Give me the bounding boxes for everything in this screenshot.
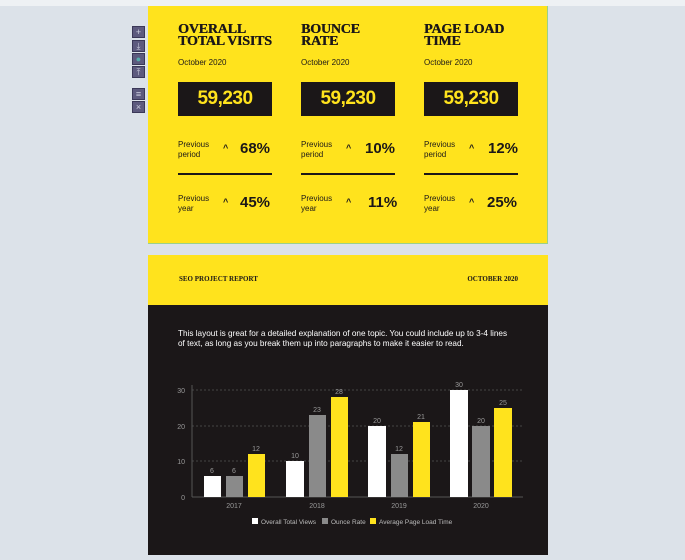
column: page load: PAGE LOAD (424, 22, 504, 37)
column: visits: October 2020 (178, 58, 226, 67)
toolbar icons: ● (136, 54, 141, 64)
toolbar icons: ≡ (136, 89, 141, 99)
column: visits: ^ (223, 197, 228, 207)
toolbar icons: × (136, 102, 141, 112)
column: bounce: BOUNCE (301, 22, 360, 37)
column: visits: year (178, 204, 194, 213)
panel: report header: OCTOBER 2020 (467, 275, 518, 283)
panel: stats (148, 6, 548, 244)
column: bounce: Previous (301, 194, 332, 203)
bar chart: 20 (177, 424, 185, 431)
bar chart: 12 (395, 446, 403, 453)
column: visits (178, 22, 272, 213)
column: page load (424, 22, 518, 213)
column: page load: TIME (424, 34, 461, 49)
column: bounce: ^ (346, 197, 351, 207)
bar chart: 30 (455, 382, 463, 389)
column: bounce: 59,230 (320, 88, 376, 109)
bar chart: 12 (252, 446, 260, 453)
bar chart: 20 (477, 418, 485, 425)
column: bounce: 10% (365, 140, 395, 157)
column: visits: ^ (223, 143, 228, 153)
panel: report header (148, 255, 548, 305)
bar chart: 28 (335, 389, 343, 396)
bar chart: 2020 (473, 503, 489, 510)
column: page load: period (424, 150, 446, 159)
column: bounce: Previous (301, 140, 332, 149)
bar chart: 23 (313, 407, 321, 414)
column: visits: TOTAL VISITS (178, 34, 272, 49)
column: visits: OVERALL (178, 22, 246, 37)
column: page load: Previous (424, 194, 455, 203)
toolbar icons: + (136, 27, 141, 37)
column: visits: 45% (240, 194, 270, 211)
column: bounce: 11% (368, 194, 397, 211)
bar chart: 25 (499, 400, 507, 407)
text block: This layout is great for a detailed explanation of one topic. You could include up to 3-4 lines of text, as long as you break them up into paragraphs to make it easier to read. (178, 329, 507, 348)
column: visits: Previous (178, 140, 209, 149)
column: bounce (301, 22, 397, 213)
column: bounce: year (301, 204, 317, 213)
column: page load: Previous (424, 140, 455, 149)
toolbar icons (132, 26, 145, 113)
column: bounce: RATE (301, 34, 338, 49)
column: page load: 25% (487, 194, 517, 211)
bar chart: 21 (417, 414, 425, 421)
column: bounce: period (301, 150, 323, 159)
column: bounce: October 2020 (301, 58, 349, 67)
column: visits: period (178, 150, 200, 159)
bar chart: 2017 (226, 503, 242, 510)
column: page load: ^ (469, 143, 474, 153)
panel: report header: SEO PROJECT REPORT (179, 275, 258, 283)
column: visits: Previous (178, 194, 209, 203)
bar chart: 2019 (391, 503, 407, 510)
column: bounce: ^ (346, 143, 351, 153)
bar chart: Ounce Rate (331, 519, 366, 526)
column: visits: 68% (240, 140, 270, 157)
toolbar icons: ⤒ (136, 67, 140, 77)
toolbar icons: ⤓ (136, 41, 140, 51)
panel: report body (148, 305, 548, 555)
column: page load: October 2020 (424, 58, 472, 67)
bar chart: 6 (232, 468, 236, 475)
column: page load: 59,230 (443, 88, 499, 109)
bar chart: Average Page Load Time (379, 519, 453, 526)
column: page load: 12% (488, 140, 518, 157)
bar chart: 10 (177, 459, 185, 466)
bar chart: Overall Total Views (261, 519, 317, 526)
bar chart: 30 (177, 388, 185, 395)
bar chart: 0 (181, 495, 185, 502)
column: page load: ^ (469, 197, 474, 207)
bar chart: 2018 (309, 503, 325, 510)
column: visits: 59,230 (197, 88, 253, 109)
column: page load: year (424, 204, 440, 213)
bar chart: 20 (373, 418, 381, 425)
bar chart: 10 (291, 453, 299, 460)
bar chart: 6 (210, 468, 214, 475)
